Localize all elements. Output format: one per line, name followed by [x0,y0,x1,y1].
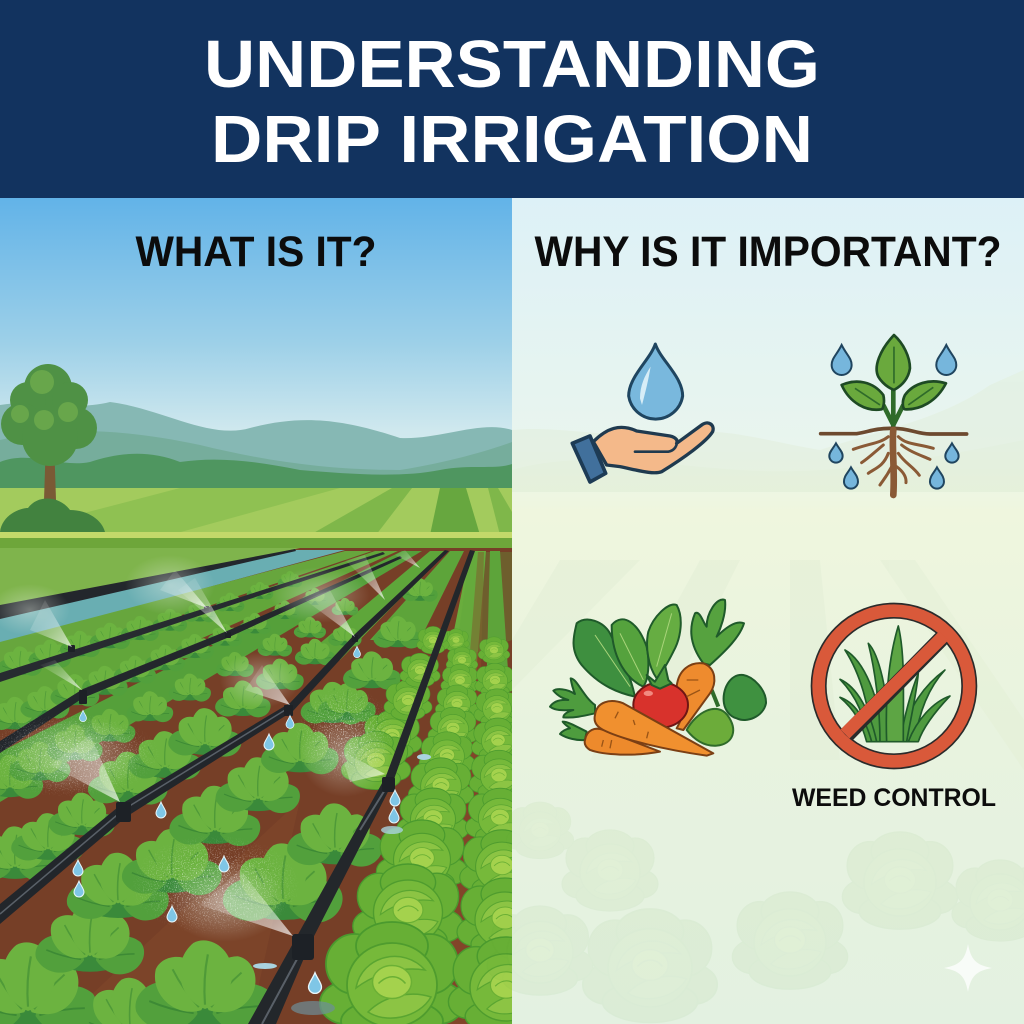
drip pipes [0,549,475,1024]
faded field rows [512,560,1024,770]
title line 1: UNDERSTANDING [204,27,820,102]
spinach plants [0,578,439,1024]
sparkle [944,944,992,992]
water drops [73,646,431,1015]
panel background [512,198,1024,1024]
icon: no weeds sign [819,611,969,761]
title line 2: DRIP IRRIGATION [211,102,813,177]
icon: plant with roots and drops [821,335,967,495]
icon: vegetables [550,600,766,756]
title banner [0,0,1024,198]
heading: what is it: WHAT IS IT? [136,228,376,276]
far field [0,488,512,550]
heading: why is it important: WHY IS IT IMPORTANT? [534,228,1002,276]
label: weed control: WEED CONTROL [792,784,996,812]
lettuce rows [320,552,564,1024]
tree [0,364,105,532]
mountains [0,402,512,490]
icon: hand holding water drop [572,344,713,482]
faded landscape [512,370,1024,492]
panel: why is it important [487,198,1024,1024]
panel: what is it [0,198,564,1024]
far crop leaves [0,571,359,802]
soil and crop rows [0,548,512,1024]
sky [0,198,512,488]
faded lettuces [487,802,1024,1022]
water sprays [0,550,420,942]
emitters [68,606,395,960]
